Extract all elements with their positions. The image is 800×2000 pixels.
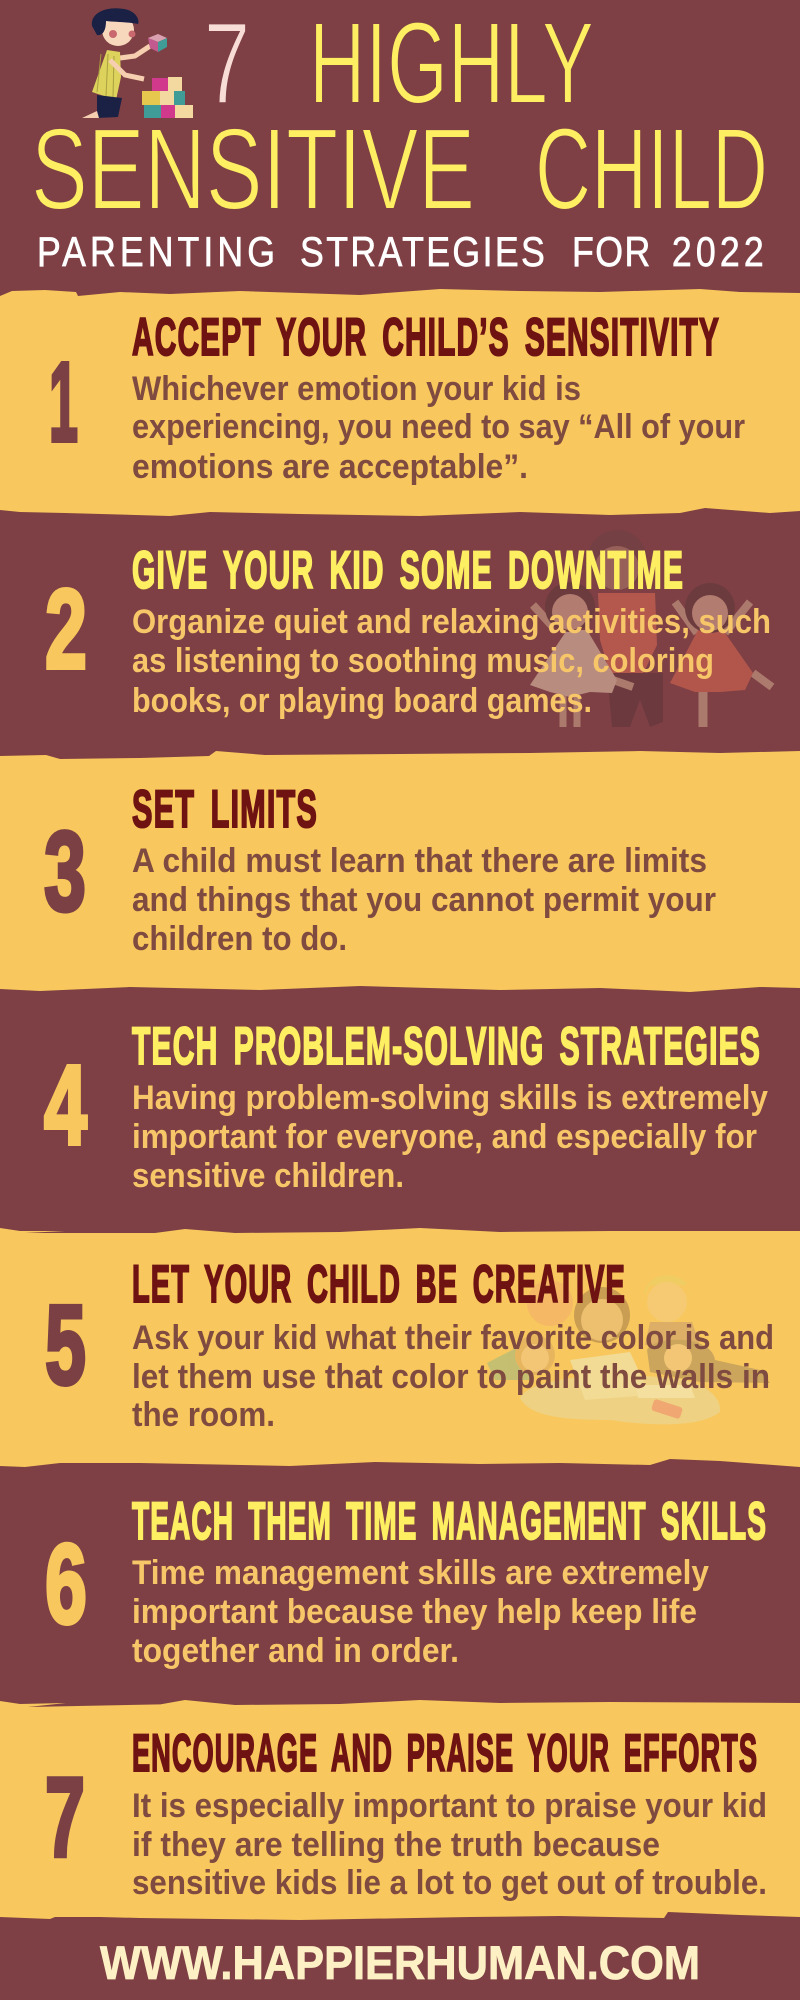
number 5: 5 [45, 1282, 86, 1408]
body 6: important because they help keep life [132, 1593, 697, 1631]
body 7: if they are telling the truth because [132, 1826, 660, 1864]
body 3: children to do. [132, 920, 347, 958]
panel: section 4 [44, 1017, 768, 1195]
number 2: 2 [45, 566, 87, 692]
heading 3: SET LIMITS [132, 780, 318, 839]
body 2: books, or playing board games. [132, 682, 592, 720]
illustration: children drawing on a mat [487, 1275, 770, 1424]
subtitle: STRATEGIES [300, 229, 545, 276]
subtitle: 2022 [672, 229, 764, 276]
body 1: experiencing, you need to say “All of your [132, 408, 745, 446]
body 1 [132, 370, 745, 486]
right child [670, 583, 772, 727]
body 2 [132, 603, 771, 720]
subtitle [37, 229, 764, 276]
title line 1: HIGHLY [309, 0, 594, 128]
panel: section 5 [45, 1255, 774, 1434]
footer url: WWW.HAPPIERHUMAN.COM [100, 1936, 700, 1989]
subtitle: FOR [572, 229, 650, 276]
panel: section 3 [44, 780, 716, 958]
panel: section 7 [45, 1724, 767, 1902]
body 6: Time management skills are extremely [132, 1554, 709, 1592]
body 7 [132, 1787, 767, 1902]
title number 7: 7 [204, 0, 250, 128]
band: yellow section 7 [0, 1700, 800, 1920]
body 6 [132, 1554, 709, 1670]
title block [31, 0, 768, 276]
body 1: Whichever emotion your kid is [132, 370, 581, 408]
body 4 [132, 1079, 768, 1195]
body 4: important for everyone, and especially for [132, 1118, 757, 1156]
panel: section 1: 1 [49, 339, 78, 465]
number 3: 3 [44, 808, 86, 934]
band: yellow section 1 [0, 289, 800, 516]
body 1: emotions are acceptable”. [132, 448, 528, 486]
number 7: 7 [45, 1754, 85, 1880]
body 5: the room. [132, 1396, 275, 1434]
left child [530, 582, 633, 727]
band: yellow section 5 [0, 1228, 800, 1467]
body 5 [132, 1319, 774, 1434]
subtitle: PARENTING [37, 229, 275, 276]
panel: section 6 [45, 1492, 767, 1670]
title line 2 left: SENSITIVE [31, 104, 475, 234]
number 4: 4 [44, 1042, 87, 1168]
band: yellow section 3 [0, 751, 800, 992]
body 4: Having problem-solving skills is extremely [132, 1079, 768, 1117]
illustration: dancing children [530, 530, 772, 727]
panel: section 1 [49, 308, 745, 486]
body 4: sensitive children. [132, 1157, 404, 1195]
panel: section 2 [45, 541, 771, 720]
icon: boy playing with blocks [82, 8, 193, 118]
number 6: 6 [45, 1521, 87, 1647]
middle child [587, 530, 663, 727]
body 5: let them use that color to paint the walls in [132, 1358, 770, 1396]
body 2: as listening to soothing music, coloring [132, 642, 714, 680]
body 3 [132, 842, 716, 958]
body 3: A child must learn that there are limits [132, 842, 707, 880]
body 6: together and in order. [132, 1632, 459, 1670]
body 3: and things that you cannot permit your [132, 881, 716, 919]
